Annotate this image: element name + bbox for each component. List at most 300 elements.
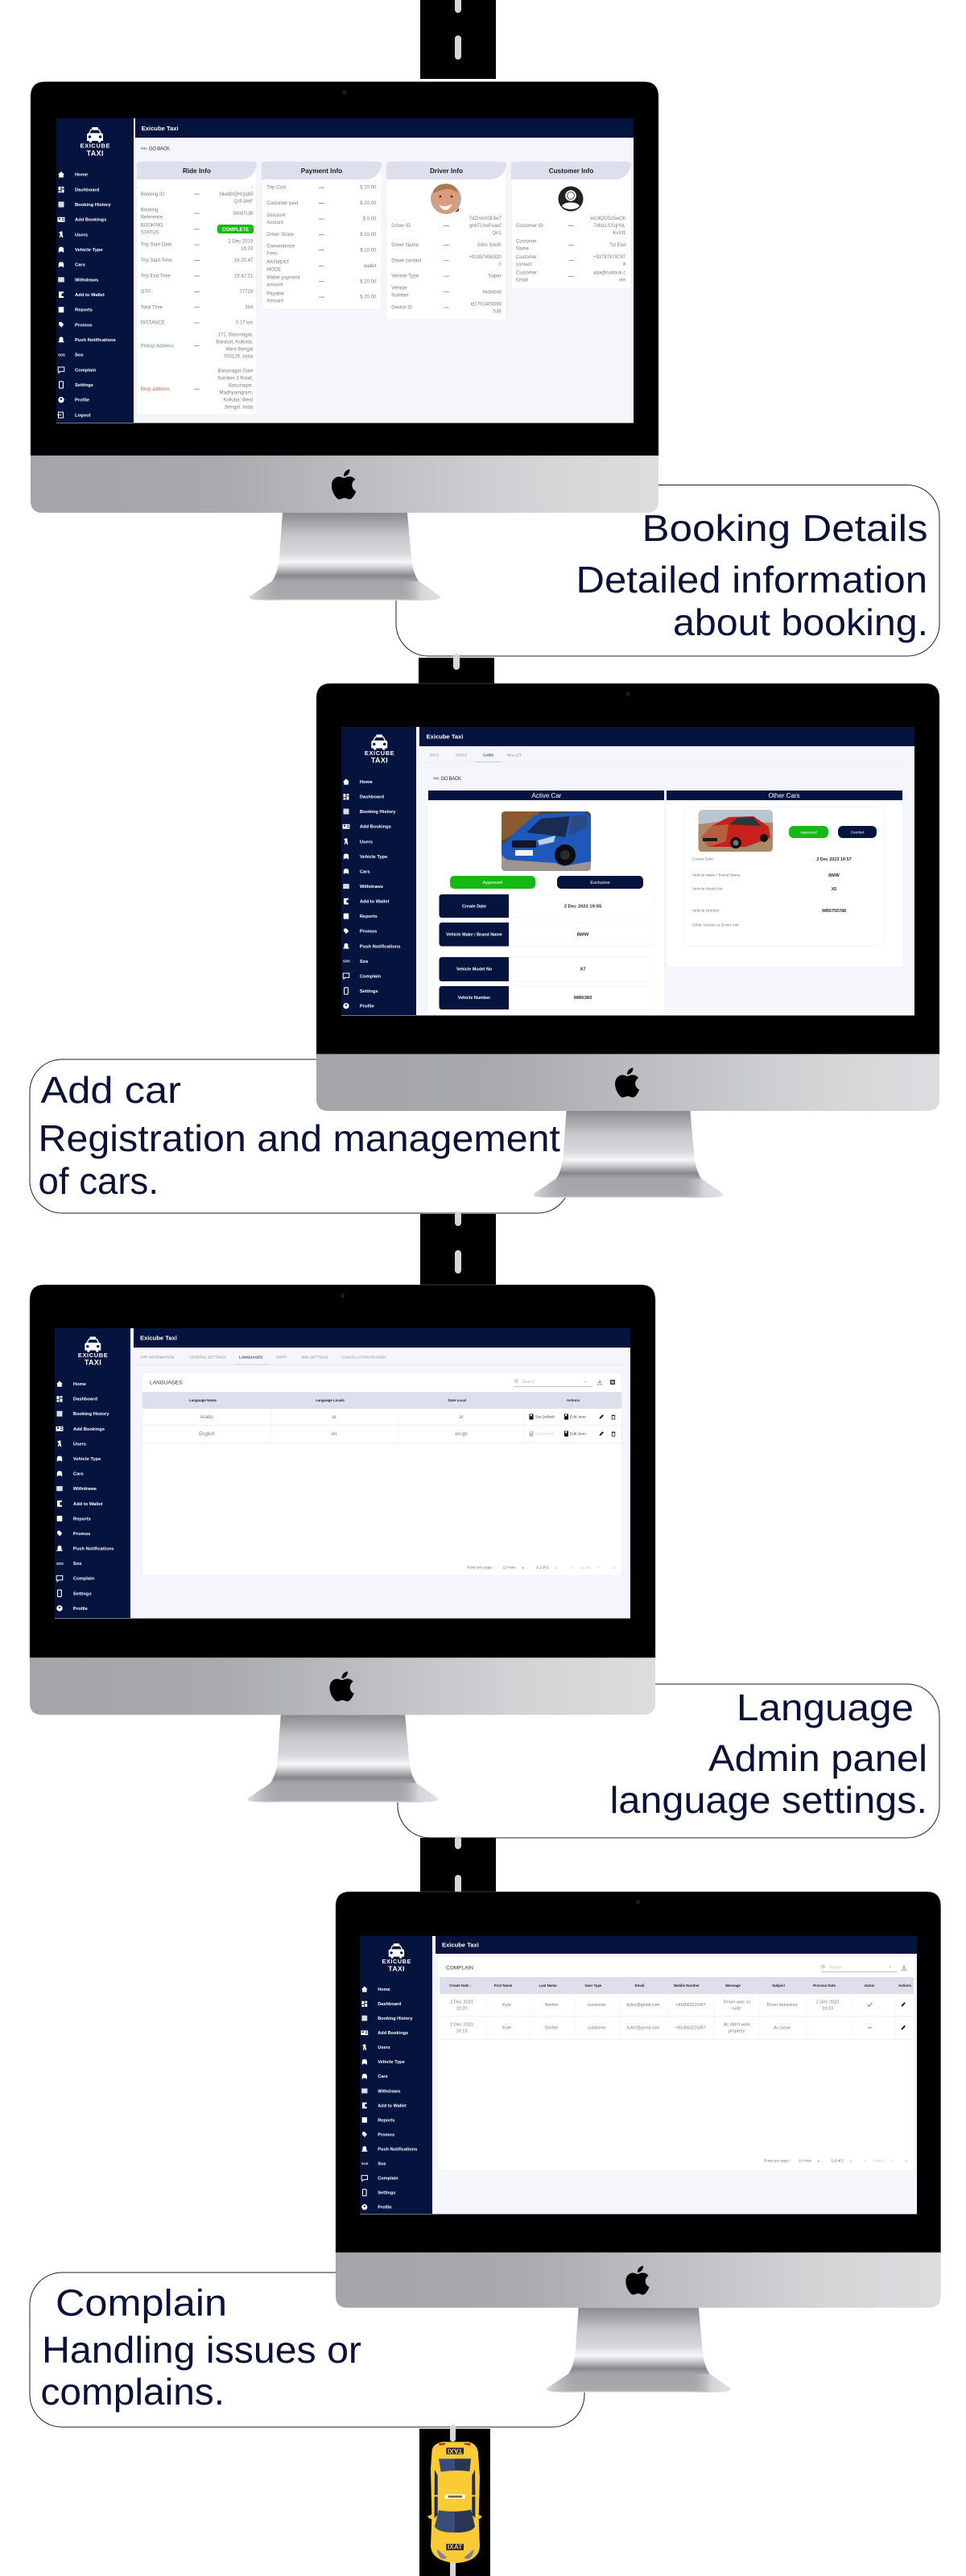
panel: ride info: Pickup Address	[141, 344, 174, 349]
panel: ride info: COMPLETE	[222, 228, 249, 233]
tabs: SMTP	[276, 1356, 287, 1360]
sidebar navigation: Vehicle Type	[378, 2060, 405, 2065]
detail rows	[440, 894, 654, 1009]
icon: customer avatar	[559, 187, 583, 211]
tabs: WALLET	[507, 753, 522, 758]
panel: payment info: amount	[266, 283, 283, 288]
pagination: 1-2 of 2	[536, 1566, 549, 1570]
panel: ride info: OTP :	[141, 290, 154, 295]
detail rows: Other Vehicle or Driver Info	[692, 923, 739, 927]
text: language description: language settings.	[610, 1779, 927, 1821]
panel: payment info	[262, 162, 382, 309]
tabs: APP INFORMATION	[140, 1356, 174, 1360]
panel: customer info: om	[619, 278, 625, 283]
sidebar navigation: Profile	[378, 2206, 392, 2211]
panel: payment info: Discount	[266, 213, 286, 218]
panel: ride info: NkeBhQHQq65	[220, 192, 254, 197]
status buttons	[450, 876, 643, 889]
sidebar navigation: Cars	[360, 869, 370, 874]
panel: ride info: BOOKING	[141, 224, 163, 229]
pagination: <	[570, 1566, 573, 1570]
pagination: 1-2 of 2	[873, 2159, 883, 2162]
sidebar navigation: Cars	[378, 2074, 388, 2079]
text: complain description: complains.	[40, 2371, 225, 2413]
sidebar navigation: Withdraws	[378, 2089, 400, 2094]
panel: complain table	[438, 1957, 914, 2170]
road: segment 4	[420, 1836, 496, 1894]
table rows: Edit Json	[570, 1415, 586, 1420]
sidebar navigation: TAXI	[388, 1964, 405, 1972]
panel: payment info: MODE	[266, 267, 281, 272]
panel: ride info: 16:33	[241, 246, 254, 251]
tabs: GENERAL SETTINGS	[189, 1356, 226, 1360]
sidebar navigation: Promos	[73, 1532, 90, 1537]
monitor body and stand	[336, 1892, 941, 2392]
panel: driver info: Qn1	[492, 231, 502, 236]
sidebar navigation: Add to Wallet	[73, 1502, 103, 1507]
sidebar navigation: Settings	[73, 1591, 92, 1596]
panel: payment info: $ 10.00	[360, 248, 377, 253]
panel: customer info: Name	[516, 246, 530, 251]
sidebar navigation: EXICUBE	[382, 1958, 411, 1965]
detail rows: Vehicle Model No	[456, 968, 493, 972]
table header: Email	[635, 1984, 644, 1988]
panel: ride info: Trip Start Date	[141, 243, 172, 248]
search and toolbar: ×	[584, 1380, 588, 1385]
panel: payment info: Payable	[266, 291, 285, 296]
panel: payment info: Customer paid	[266, 201, 298, 206]
search and toolbar: Search	[522, 1380, 535, 1385]
pagination: >	[891, 2159, 894, 2163]
sidebar navigation: Home	[73, 1382, 87, 1387]
header title: Exicube Taxi	[142, 125, 179, 132]
text: booking description: about booking.	[673, 601, 928, 643]
detail rows: Create Date	[462, 905, 486, 910]
image: red car	[699, 810, 773, 852]
table rows: kylez@gmail.com	[627, 2026, 659, 2031]
sidebar navigation: Withdraws	[75, 278, 98, 283]
sidebar navigation: EXICUBE	[365, 749, 394, 757]
panel: other cars	[667, 791, 902, 967]
text: add car description: Registration and management	[39, 1117, 560, 1159]
pagination	[467, 1565, 615, 1570]
pagination: ▼	[522, 1567, 524, 1570]
panel: driver info	[386, 162, 506, 320]
table rows: 19:23	[822, 2007, 833, 2012]
table header: status	[865, 1984, 875, 1988]
road: final segment	[419, 2425, 490, 2576]
pagination: <	[865, 2159, 866, 2163]
sidebar navigation: Profile	[75, 398, 90, 403]
table rows: ar	[332, 1415, 336, 1420]
sidebar navigation: Vehicle Type	[73, 1457, 101, 1462]
table rows: +914563215457	[675, 2003, 706, 2008]
monitor 3: language settings	[30, 1285, 655, 1802]
sidebar navigation: Promos	[378, 2132, 394, 2137]
panel: ride info: Drop address	[141, 387, 170, 392]
panel: driver info: +91857456320	[469, 255, 502, 260]
table rows: Arabic	[200, 1415, 214, 1420]
sidebar navigation	[342, 735, 401, 1009]
sidebar navigation: Add Bookings	[378, 2031, 408, 2036]
sidebar navigation: Dashboard	[73, 1397, 98, 1402]
sidebar navigation: Profile	[73, 1607, 89, 1612]
panel: active car: Active Car	[532, 792, 562, 799]
panel: customer info: Customer Info	[549, 167, 593, 175]
table rows: Driver was so	[724, 2000, 750, 2004]
panel: driver info: Driver contact	[391, 258, 422, 263]
panel: driver info: John Smith	[477, 243, 502, 248]
detail rows: Vehicle Make / Brand Name	[692, 873, 741, 877]
panel: driver info: 536	[493, 309, 502, 314]
sidebar navigation: Add to Wallet	[360, 900, 390, 905]
table header: Mobile Number	[674, 1984, 700, 1988]
search and toolbar: ×	[889, 1966, 892, 1971]
table title: COMPLAIN	[446, 1965, 473, 1971]
table rows: rude.	[732, 2007, 742, 2012]
panel: customer info: Tst Etet	[609, 243, 626, 248]
tabs: CANCELLATION REASON	[341, 1356, 386, 1360]
sidebar navigation: Complain	[378, 2177, 398, 2182]
go back link: <<- GO BACK	[433, 777, 461, 782]
sidebar navigation: EXICUBE	[78, 1352, 108, 1359]
panel: ride info: Basunagar Gate	[218, 369, 254, 374]
panel: customer info: wC4QOSz5wOh	[589, 217, 625, 221]
table header: Language Locale	[316, 1398, 345, 1402]
panel: ride info: Number 3 Road,	[217, 377, 254, 382]
sidebar navigation	[361, 1943, 417, 2211]
sidebar navigation: Withdraws	[73, 1487, 97, 1492]
sidebar navigation: Add Bookings	[360, 825, 391, 830]
detail rows: Create Date	[692, 857, 713, 861]
pagination: 1-2 of 2	[831, 2159, 844, 2163]
table rows: Bertler	[545, 2026, 559, 2031]
table rows: customer	[588, 2026, 606, 2031]
sidebar navigation: Logout	[75, 413, 91, 418]
panel: ride info	[137, 162, 257, 415]
table rows: en	[332, 1432, 336, 1437]
panel: ride info: 171, Basunagar,	[218, 333, 254, 338]
table rows: properly.	[729, 2029, 746, 2034]
panel: payment info: Wallet payment	[266, 276, 300, 281]
sidebar navigation: Cars	[75, 263, 85, 268]
table header: Create Date ↓	[449, 1984, 472, 1988]
detail rows: WB5755788	[822, 909, 846, 914]
detail rows: X7	[580, 968, 586, 972]
panel: driver info: Driver Info	[430, 167, 463, 175]
text: add car description	[39, 1117, 560, 1202]
text: language description: Admin panel	[708, 1737, 927, 1779]
panel: payment info: $ 20.00	[360, 279, 377, 284]
panel: ride info: Kolkata, West	[223, 398, 254, 403]
sidebar navigation: Push Notifications	[75, 338, 116, 343]
tabs: INFO	[430, 753, 439, 758]
sidebar navigation: Booking History	[75, 203, 112, 208]
panel: driver info: Driver Name	[391, 243, 419, 248]
table rows	[440, 1994, 914, 2040]
pagination: Rows per page:	[764, 2159, 790, 2163]
heading: language: Language	[737, 1686, 914, 1728]
table rows: Bertler	[545, 2003, 559, 2008]
panel: driver info: Number	[391, 294, 409, 299]
table header: User Type	[585, 1984, 602, 1988]
panel: languages table	[142, 1373, 621, 1575]
panel: active car	[428, 791, 664, 1015]
sidebar navigation: Home	[75, 173, 89, 178]
panel: driver info: gbhTLheFsiacf	[469, 224, 502, 229]
sidebar navigation: TAXI	[87, 149, 103, 157]
icon: yellow taxi	[427, 2442, 482, 2563]
table rows: Driver behaviour	[767, 2003, 798, 2008]
detail rows: Vehicle Number	[692, 908, 720, 913]
panel: ride info: Reference	[141, 215, 163, 220]
text: language description	[610, 1737, 927, 1821]
panel: payment info: Payment Info	[301, 167, 342, 175]
panel: ride info: 2 Dec 2023	[229, 239, 254, 244]
monitor 1: booking details	[31, 82, 658, 601]
table rows: kylez@gmail.com	[627, 2003, 659, 2008]
table rows: Set Default	[535, 1431, 555, 1436]
sidebar navigation: Users	[378, 2046, 390, 2050]
panel: ride info: Q-ff-BHF	[233, 200, 254, 204]
text: complain description	[40, 2329, 361, 2413]
sidebar navigation: Booking History	[73, 1412, 109, 1417]
tabs: RIDES	[456, 753, 467, 758]
panel: driver info: Super	[489, 275, 502, 279]
panel: ride info: Total Time	[141, 305, 163, 310]
sidebar navigation: Settings	[75, 383, 93, 388]
sidebar navigation: Add Bookings	[75, 218, 106, 223]
header title: Exicube Taxi	[427, 733, 463, 741]
table header: First Name	[494, 1984, 513, 1988]
panel: ride info: Ride Info	[183, 167, 211, 175]
table header: Subject	[772, 1984, 785, 1988]
sidebar navigation	[58, 127, 116, 418]
sidebar navigation: Reports	[378, 2118, 394, 2123]
panel: payment info: $ 20.00	[360, 186, 377, 191]
screen: cars page	[341, 727, 914, 1016]
sidebar navigation: Dashboard	[75, 188, 100, 192]
heading: booking details: Booking Details	[642, 507, 927, 549]
table rows: Kyle	[502, 2026, 511, 2031]
panel: ride info: 394	[245, 305, 254, 310]
screen: languages page	[55, 1328, 630, 1619]
detail rows: X5	[832, 887, 836, 892]
header title: Exicube Taxi	[140, 1335, 177, 1341]
table header: Language Name	[189, 1398, 217, 1402]
detail rows: BMW	[577, 932, 589, 937]
panel: customer info: Customer	[516, 270, 537, 275]
table rows: customer	[588, 2003, 606, 2008]
tabs: LANGUAGES	[239, 1356, 262, 1360]
sidebar navigation	[56, 1337, 114, 1612]
sidebar navigation: Promos	[360, 930, 377, 935]
panel: customer info: contact	[516, 262, 532, 267]
monitor 2: add car	[316, 683, 939, 1198]
monitor body and stand	[316, 683, 939, 1198]
panel: ride info: Booking ID	[141, 192, 165, 197]
panel: ride info: -	[251, 185, 253, 190]
panel: ride info: Barasat, Kolkata,	[217, 341, 254, 345]
panel: payment info: $ 20.00	[360, 201, 377, 206]
road: top segment	[420, 0, 496, 79]
panel: customer info	[511, 162, 631, 289]
sidebar navigation: Add Bookings	[73, 1427, 105, 1432]
panel: ride info: SKMTUB	[233, 212, 253, 217]
pagination: 1-2 of 2	[580, 1567, 590, 1570]
panel: customer info: Customer ID	[516, 224, 543, 229]
sidebar navigation: Complain	[73, 1577, 95, 1582]
panel: ride info: 16:35:47	[234, 258, 254, 263]
sidebar navigation: Settings	[360, 989, 378, 994]
panel: payment info: $ 0.00	[363, 217, 377, 222]
screen: complain page	[360, 1936, 917, 2215]
detail rows	[692, 857, 852, 927]
panel: driver info: Hxbxbxb	[482, 290, 502, 295]
panel: customer info: KvXl1	[613, 231, 626, 236]
panel: driver info: Vehicle	[391, 287, 407, 291]
sidebar navigation: Complain	[360, 974, 382, 979]
table header: Actions	[898, 1984, 912, 1988]
sidebar navigation: Sos	[378, 2162, 386, 2167]
sidebar navigation: Reports	[360, 914, 378, 919]
table rows: +914563215457	[675, 2026, 706, 2031]
monitor body and stand	[31, 82, 658, 601]
panel: ride info: Trip End Time	[141, 274, 171, 279]
sidebar navigation: Promos	[75, 323, 93, 328]
pagination: >	[597, 1566, 601, 1570]
table rows: ar	[459, 1415, 464, 1420]
road: segment 3	[420, 1212, 496, 1286]
status buttons: Approved	[483, 881, 502, 886]
tabs: CARS	[483, 753, 493, 758]
panel: ride info: STATUS	[141, 231, 159, 236]
table rows: 19:20	[456, 2007, 467, 2012]
table header: Process Date	[813, 1984, 836, 1988]
sidebar navigation: Sos	[360, 960, 368, 964]
detail rows: BMW	[828, 873, 840, 878]
panel: customer info: 8	[623, 262, 626, 267]
pagination: Rows per page:	[467, 1566, 493, 1570]
status buttons: Approved	[800, 831, 817, 836]
detail rows: Vehicle Make / Brand Name	[446, 932, 502, 937]
panel: driver info: 0	[498, 262, 502, 267]
callout: language	[398, 1684, 939, 1838]
table header: Date Local	[448, 1398, 466, 1402]
sidebar navigation: Dashboard	[360, 795, 384, 800]
sidebar navigation: Sos	[73, 1562, 81, 1567]
panel: customer info: +91787878787	[593, 255, 626, 260]
icon: yellow taxi: IXAT	[448, 2447, 462, 2455]
panel: driver info: id1701409399	[471, 302, 502, 307]
header title: Exicube Taxi	[442, 1942, 479, 1949]
panel: ride info: Booking	[141, 208, 158, 213]
sidebar navigation: Push Notifications	[360, 944, 401, 949]
pagination: 10 rows	[502, 1565, 516, 1570]
go back link: <<- GO BACK	[141, 147, 170, 151]
pagination: >|	[905, 2159, 907, 2163]
screen: booking details page	[56, 118, 634, 423]
sidebar navigation: Sos	[75, 353, 84, 358]
panel: payment info: Fees	[266, 252, 278, 257]
panel: ride info: Trip Start Time	[141, 258, 172, 263]
sidebar navigation: Vehicle Type	[75, 248, 103, 253]
heading: complain: Complain	[56, 2281, 227, 2323]
sidebar navigation: Complain	[75, 368, 97, 373]
sidebar navigation: Push Notifications	[378, 2148, 417, 2153]
status buttons: Comfort	[850, 831, 865, 836]
sidebar navigation: Home	[378, 1988, 390, 1992]
sidebar navigation: Cars	[73, 1472, 84, 1477]
sidebar navigation: Reports	[75, 308, 93, 313]
search and toolbar	[514, 1380, 615, 1387]
sidebar navigation: Withdraws	[360, 885, 383, 890]
panel: payment info: Amount	[266, 299, 283, 303]
table rows: Kyle	[502, 2003, 511, 2008]
sidebar navigation: Booking History	[360, 810, 396, 815]
table rows: Set Default	[535, 1415, 555, 1420]
panel: payment info: Trip Cost	[266, 186, 287, 191]
tabs	[422, 753, 910, 762]
panel: ride info: Bengal, India	[225, 406, 254, 411]
table rows: 2 Dec 2023	[816, 2000, 839, 2004]
sidebar navigation: Vehicle Type	[360, 855, 388, 860]
pagination: |<	[849, 2159, 852, 2163]
monitor body and stand	[30, 1285, 655, 1802]
monitor 4: complain	[336, 1892, 941, 2392]
sidebar navigation: Add to Wallet	[75, 293, 105, 298]
panel: payment info: Amount	[266, 221, 283, 225]
panel: payment info: $ 10.00	[360, 233, 377, 237]
sidebar navigation: TAXI	[371, 757, 388, 765]
panel: customer info: 7dNzLSXqlYvL	[593, 224, 626, 229]
tabs: SMS SETTINGS	[301, 1356, 328, 1360]
panel: driver info: Device ID	[391, 306, 413, 311]
panel: payment info: PAYMENT	[266, 260, 290, 265]
panel: driver info: 7dZiVoX0E8e7	[469, 217, 502, 221]
panel: payment info: wallet	[363, 264, 377, 269]
text: add car description: of cars.	[39, 1160, 159, 1202]
sidebar navigation: Add to Wallet	[378, 2103, 407, 2108]
pagination: |<	[555, 1566, 559, 1570]
table rows: 2 Dec 2023	[450, 2022, 473, 2027]
callout: booking details	[396, 485, 939, 656]
table title: LANGUAGES	[150, 1380, 183, 1385]
table rows: 19:19	[456, 2029, 467, 2034]
table header: Message	[725, 1984, 741, 1988]
table rows: Ac issue	[774, 2026, 791, 2031]
panel: ride info: West Bengal	[225, 348, 253, 353]
sidebar navigation: Booking History	[378, 2017, 413, 2021]
table rows: Edit Json	[570, 1431, 586, 1436]
status buttons: Exclusive	[590, 881, 610, 886]
table rows: en-gb	[455, 1432, 468, 1437]
heading: add car: Add car	[40, 1069, 181, 1111]
table rows: English	[199, 1432, 215, 1437]
tabs	[135, 1356, 628, 1365]
sidebar navigation: Users	[360, 840, 373, 844]
sidebar navigation: Users	[73, 1442, 86, 1447]
detail rows: 2 Dec 2023 19:57	[816, 857, 852, 862]
table header	[440, 1977, 914, 1994]
panel: customer info: Customer	[516, 239, 537, 244]
panel: payment info: $ 20.00	[360, 295, 377, 300]
panel: ride info: 0.17 km	[236, 321, 253, 326]
panel: ride info: 700129, India	[224, 355, 254, 360]
detail rows: Vehicle Number	[458, 996, 491, 1001]
status buttons	[789, 826, 877, 838]
panel: driver info: Driver ID	[391, 224, 411, 229]
